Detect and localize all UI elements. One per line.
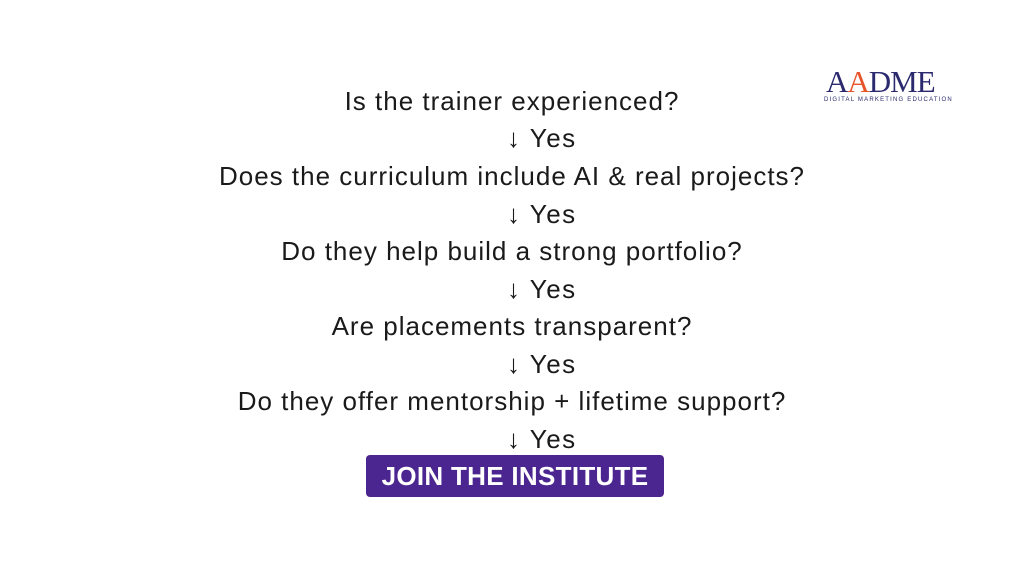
text: Do they help build a strong portfolio? bbox=[281, 236, 743, 266]
text: Does the curriculum include AI & real projects? bbox=[219, 161, 805, 191]
text: ↓ Yes bbox=[507, 123, 577, 153]
logo: AADME bbox=[826, 64, 935, 99]
text: Do they offer mentorship + lifetime support? bbox=[238, 386, 786, 416]
button: join the institute bbox=[366, 455, 664, 497]
logo: DIGITAL MARKETING EDUCATION bbox=[824, 97, 953, 103]
text: ↓ Yes bbox=[507, 274, 577, 304]
button: join the institute: JOIN THE INSTITUTE bbox=[382, 461, 648, 491]
flowchart questions bbox=[219, 86, 805, 454]
text: ↓ Yes bbox=[507, 199, 577, 229]
text: Are placements transparent? bbox=[332, 311, 692, 341]
text: ↓ Yes bbox=[507, 424, 577, 454]
text: ↓ Yes bbox=[507, 349, 577, 379]
text: Is the trainer experienced? bbox=[345, 86, 679, 116]
